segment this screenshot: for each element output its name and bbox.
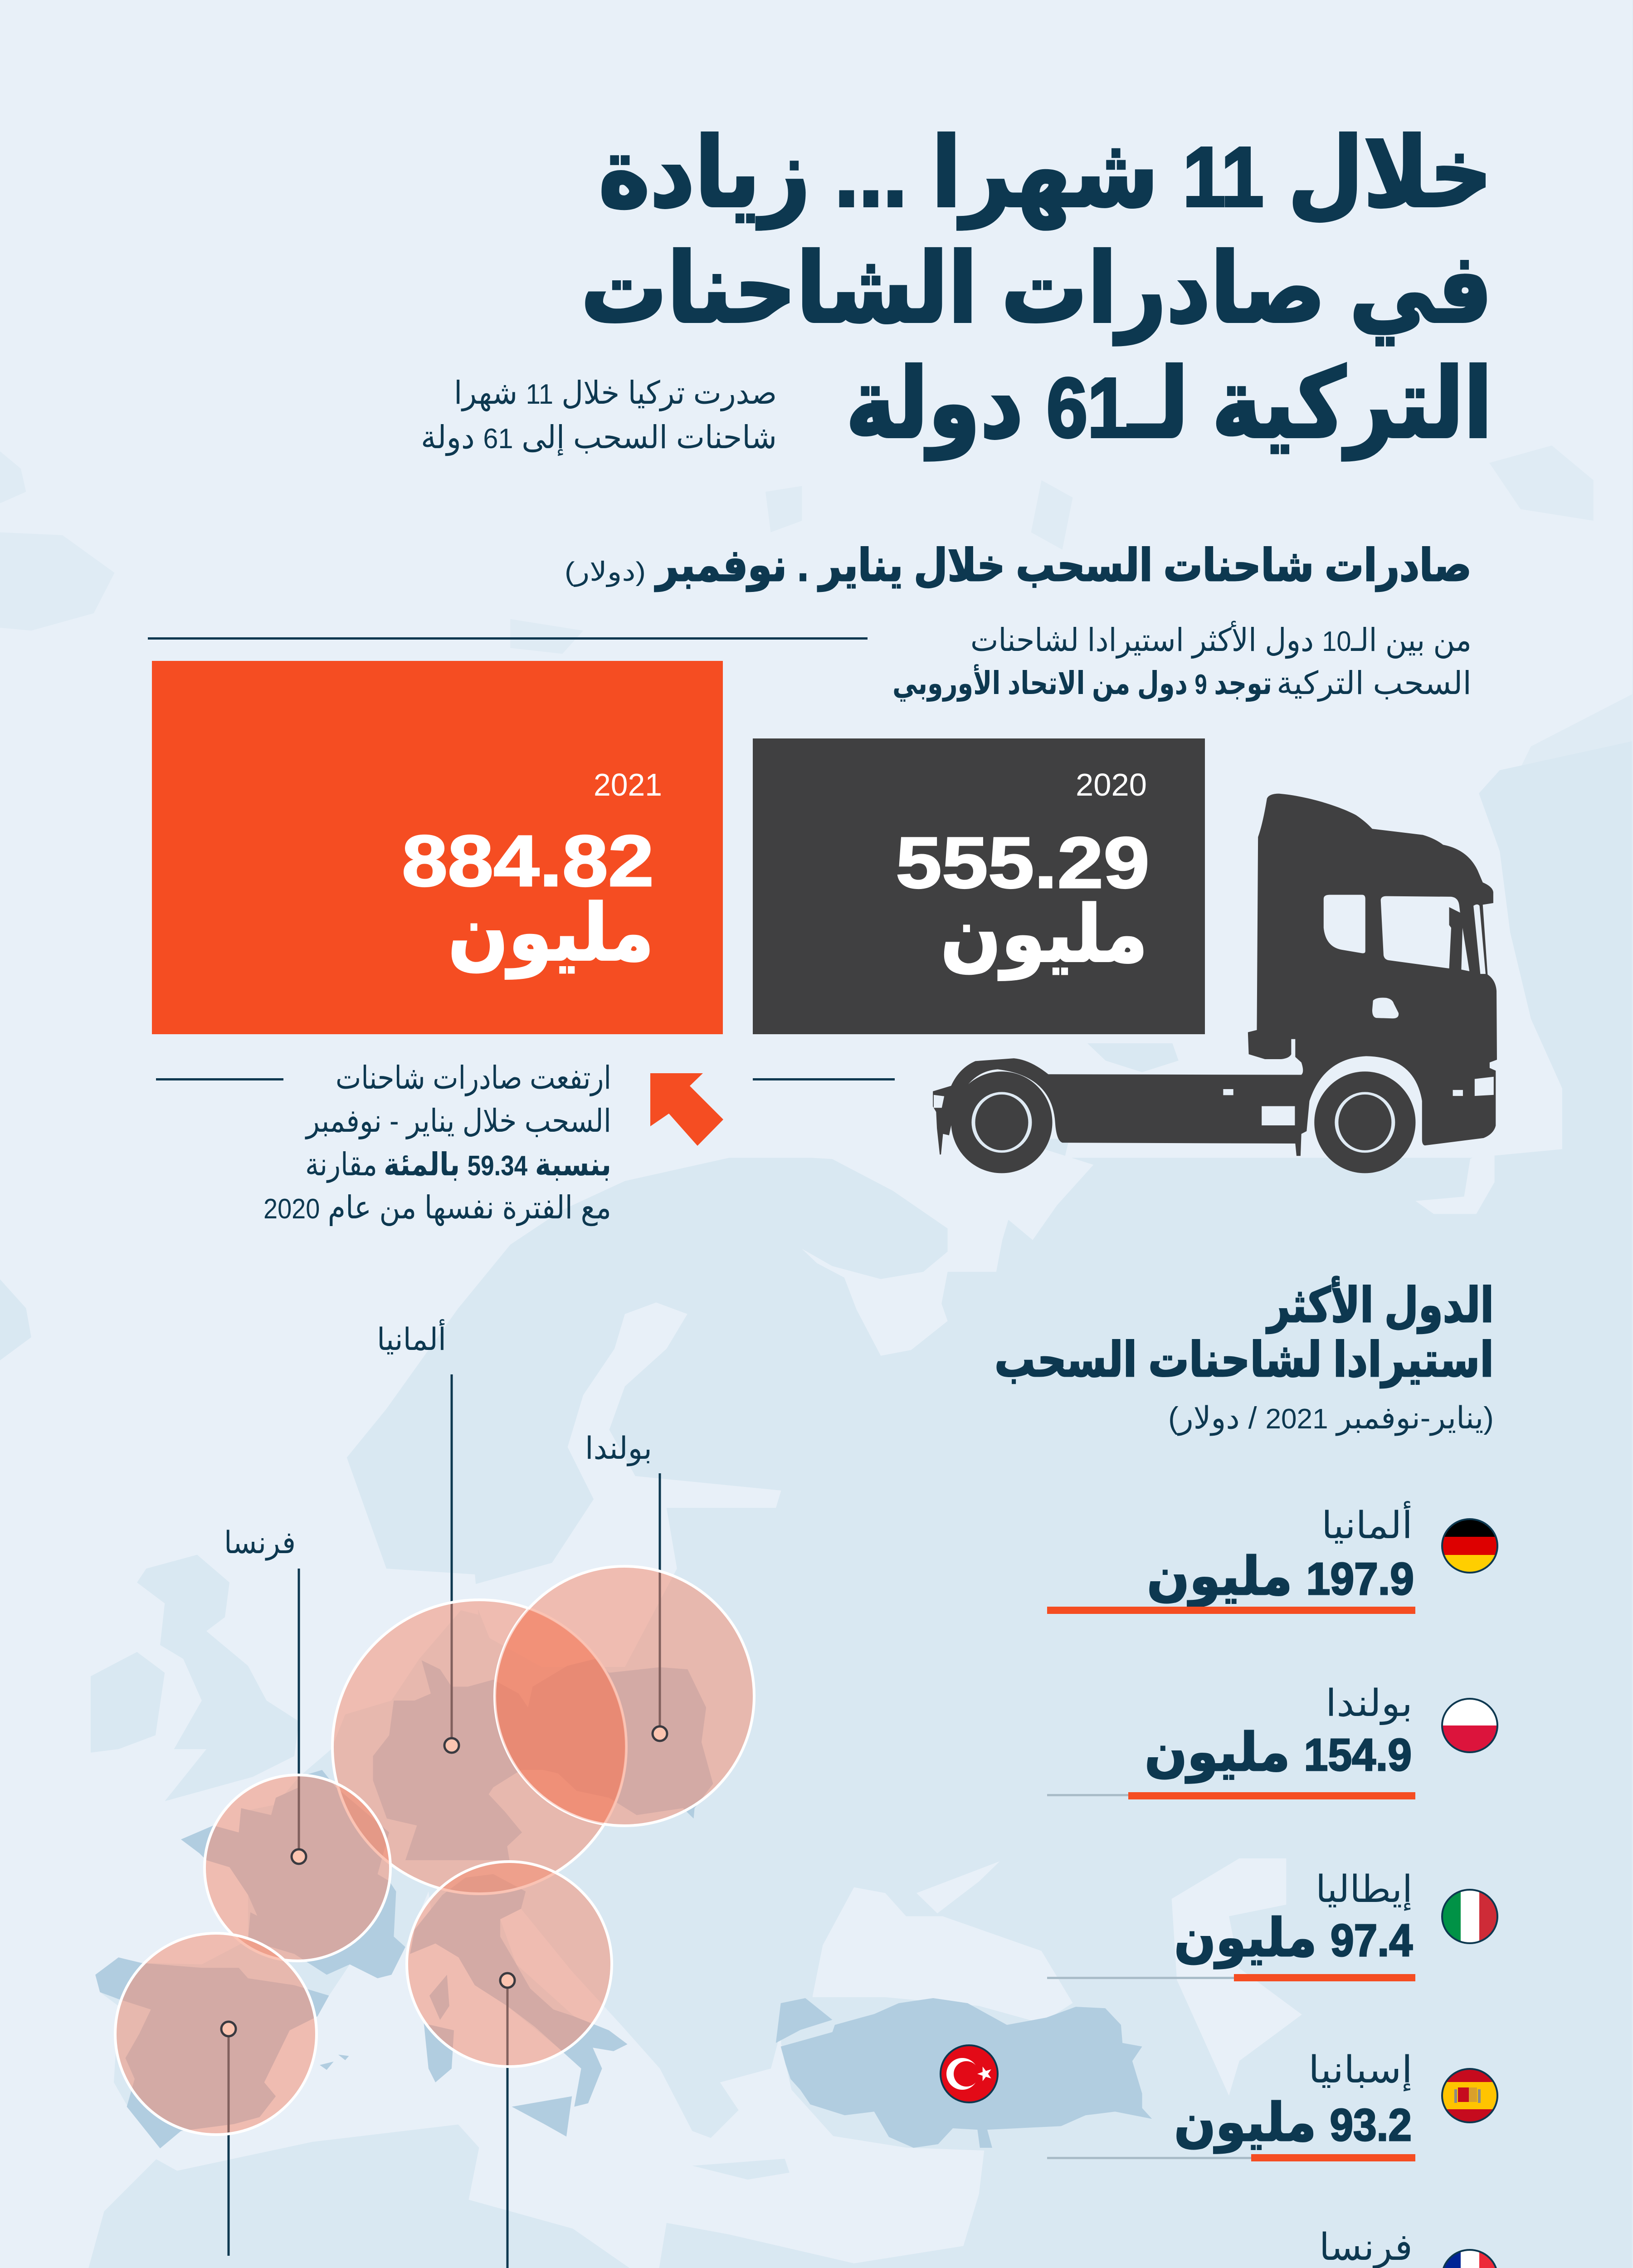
- bar: 2021: [152, 661, 723, 1034]
- bar: 2021: 2021: [594, 767, 662, 802]
- bar: 2020: مليون: [941, 891, 1148, 980]
- spain shape: [95, 1957, 349, 2148]
- bar: 2020: 555.29: [896, 822, 1150, 903]
- flag: france: [1442, 2250, 1498, 2268]
- map leader lines: [229, 1374, 660, 2268]
- row: poland: [1047, 1683, 1497, 1799]
- row: germany: [1047, 1501, 1497, 1614]
- row: spain: 93.2 مليون: [1174, 2093, 1412, 2154]
- title: في صادرات الشاحنات: [581, 235, 1492, 345]
- text: increase note: مقارنة: [305, 1147, 377, 1183]
- text: increase note: ارتفعت صادرات شاحنات: [336, 1060, 611, 1096]
- text: increase note: السحب خلال يناير - نوفمبر: [305, 1103, 611, 1139]
- row: france: [1047, 2227, 1498, 2268]
- row: poland: 154.9 مليون: [1145, 1723, 1412, 1784]
- circle overlap: [495, 1609, 625, 1824]
- subtitle: صدرت تركيا خلال 11 شهرا: [454, 375, 777, 411]
- subtitle: شاحنات السحب إلى 61 دولة: [421, 420, 777, 456]
- map labels: بولندا: [585, 1431, 652, 1466]
- heading: top importers: (يناير-نوفمبر 2021 / دولار): [1168, 1401, 1494, 1436]
- rule above chart: [148, 637, 868, 640]
- row: france: فرنسا: [1319, 2227, 1413, 2268]
- italy shape: [410, 1874, 628, 2136]
- subtitle: [421, 375, 777, 456]
- text: top 10 note: توجد 9 دول من الاتحاد الأوروبي: [892, 664, 1272, 702]
- row: spain: [1047, 2049, 1497, 2161]
- row: poland: بولندا: [1326, 1683, 1413, 1725]
- arrow up: [650, 1073, 723, 1146]
- icon: truck: [933, 794, 1497, 1173]
- highlighted countries on map: [95, 1659, 713, 2148]
- bar: 2021: مليون: [448, 890, 654, 979]
- truck base rule: [753, 1078, 895, 1080]
- heading: top importers: استيرادا لشاحنات السحب: [994, 1333, 1494, 1388]
- title: [581, 119, 1492, 461]
- poland shape: [528, 1659, 713, 1818]
- flag: poland: [1442, 1699, 1497, 1753]
- text: top 10 note: [892, 621, 1472, 702]
- row: spain: إسبانيا: [1308, 2049, 1413, 2092]
- title: التركية لـ61 دولة: [846, 350, 1492, 461]
- row: germany: 197.9 مليون: [1147, 1547, 1414, 1608]
- map labels: فرنسا: [224, 1525, 296, 1561]
- map dots: [221, 1726, 667, 2036]
- map labels: ألمانيا: [377, 1319, 446, 1357]
- row: italy: 97.4 مليون: [1174, 1908, 1413, 1969]
- text: increase note: مع الفترة نفسها من عام 2020: [263, 1190, 611, 1226]
- text: increase note: بنسبة 59.34 بالمئة: [384, 1147, 611, 1182]
- heading: top importers: [994, 1276, 1494, 1436]
- text: top 10 note: السحب التركية: [1277, 665, 1472, 702]
- france shape: [181, 1770, 405, 1978]
- flag: italy: [1442, 1890, 1498, 1943]
- bar: 2020: 2020: [1076, 767, 1147, 802]
- flag: spain: [1442, 2069, 1497, 2122]
- germany shape: [373, 1660, 543, 1860]
- text: top 10 note: من بين الـ10 دول الأكثر استيرادا لشاحنات: [970, 621, 1472, 659]
- map circles: [115, 1566, 754, 2135]
- row: germany: ألمانيا: [1321, 1501, 1413, 1546]
- bar: 2021: 884.82: [402, 820, 654, 901]
- map: turkey: [776, 1998, 1152, 2148]
- section heading: exports: (دولار): [565, 557, 646, 587]
- row: italy: [1047, 1869, 1498, 1981]
- map labels: [224, 1319, 652, 2268]
- icon: turkish flag: [941, 2045, 998, 2102]
- section heading: exports: صادرات شاحنات السحب خلال يناير . نوفمبر: [654, 540, 1472, 591]
- title: خلال 11 شهرا ... زيادة: [599, 119, 1492, 230]
- text: increase note: [156, 1060, 611, 1226]
- heading: top importers: الدول الأكثر: [1266, 1276, 1494, 1334]
- bar: 2020: [753, 738, 1205, 1034]
- flag: germany: [1442, 1519, 1497, 1573]
- row: italy: إيطاليا: [1316, 1869, 1413, 1911]
